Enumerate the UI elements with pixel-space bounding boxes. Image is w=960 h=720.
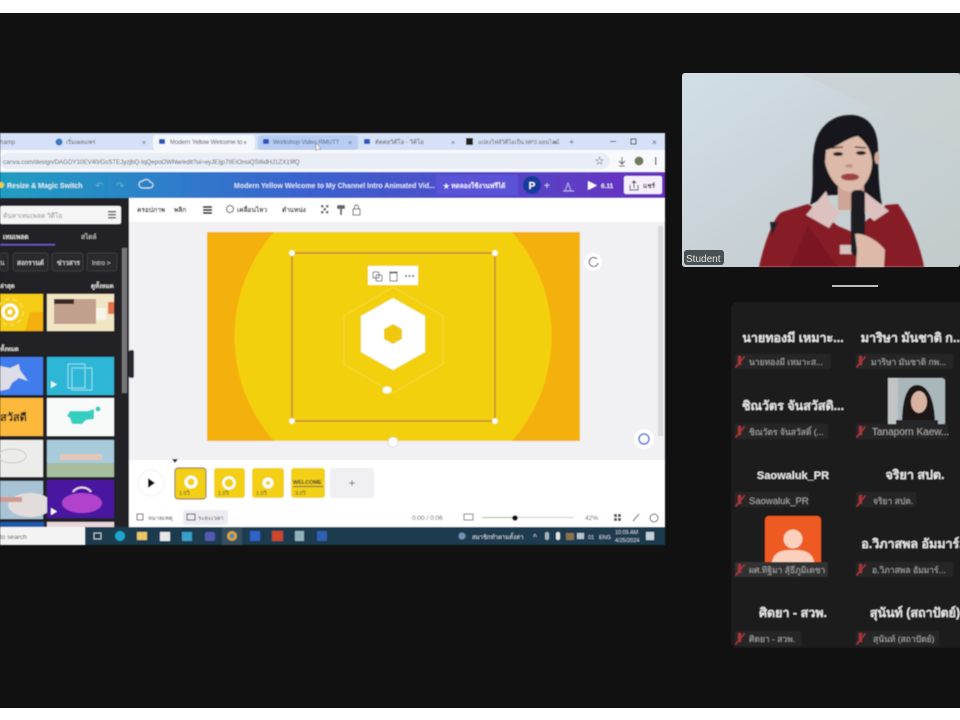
browser tab strip: ×	[243, 140, 247, 147]
browser tab strip: ×	[348, 140, 352, 147]
template thumbnails: ทั้งหมด	[0, 343, 19, 353]
mouse cursor	[316, 143, 321, 151]
name tags: อ.วิภาสพล อัมมาร์...	[872, 565, 946, 575]
canva header bar	[0, 172, 665, 198]
timeline strip: WELCOME	[293, 480, 322, 486]
canva header bar: ↶	[95, 181, 103, 192]
panel: left sidebar templates: สไตล์	[81, 232, 96, 241]
mouth	[841, 174, 859, 180]
windows taskbar: 10:05 AM	[615, 530, 639, 536]
hand	[855, 234, 885, 267]
orange avatar	[765, 516, 821, 566]
canva editor toolbar: ครอปภาพ	[137, 206, 165, 214]
name tags: Tanaporn Kaew...	[872, 427, 949, 438]
template thumbnails: สวัสดี	[0, 411, 27, 424]
panel: left sidebar templates	[0, 198, 129, 528]
panel: presenter video	[682, 73, 960, 267]
name tags: ผศ.ทิฐิมา สุ้ธีภูมิเดชา	[749, 565, 825, 576]
canva header bar: 6.11	[601, 183, 614, 190]
browser tab strip: Workshop Video RMUTT	[273, 140, 340, 146]
collar	[806, 191, 840, 228]
browser tab strip: ×	[451, 140, 455, 147]
canva header bar: P	[529, 181, 536, 192]
timeline strip: 42%	[585, 515, 598, 522]
participant names: สุนันท์ (สถาปัตย์)	[870, 605, 960, 621]
name tags: ชิณวัตร จันสวัสดิ์ (...	[749, 426, 824, 437]
windows taskbar: ^	[533, 533, 537, 542]
timeline strip: ระยะเวลา	[198, 515, 224, 522]
timeline strip: 1.0วิ	[179, 490, 190, 497]
element context menu	[368, 266, 418, 285]
participant names: อ.วิภาสพล อัมมาร์.	[861, 536, 960, 551]
participant names: จริยา สปต.	[885, 468, 945, 482]
playback time and zoom: 0:00 / 0:06	[412, 515, 443, 522]
canva header bar: ★ ทดลองใช้งานฟรีได้	[443, 181, 505, 190]
address bar: ☆	[595, 156, 604, 166]
canva editor toolbar: ตำแหน่ง	[282, 206, 306, 214]
name tags: สุนันท์ (สถาปัตย์)	[873, 634, 935, 645]
browser tab strip: ×	[553, 140, 557, 147]
canvas rotate handle	[388, 437, 398, 447]
ears	[874, 152, 880, 164]
muted mic icons	[735, 356, 866, 645]
panel: left sidebar templates: ข่าวสาร	[57, 259, 80, 267]
timeline strip: หมายเหตุ	[148, 516, 173, 522]
participant names: ชิณวัตร จันสวัสดิ...	[742, 399, 844, 413]
presenter	[759, 115, 924, 267]
canva header bar: แชร์	[643, 182, 656, 190]
windows taskbar: ENG	[599, 535, 611, 541]
panel: left sidebar templates: ล่าสุด	[0, 283, 15, 290]
address bar: canva.com/design/DAGDY10EV40/GsSTEJyzjbQ-tqQepoOWNw/edit?ui=eyJEIjp7IlEiOnsiQSI6dHJ1ZX19fQ	[3, 159, 300, 166]
bottom white strip	[0, 708, 960, 720]
rotate button	[584, 253, 602, 271]
hexagon logo	[344, 287, 443, 393]
name tags: Saowaluk_PR	[749, 496, 809, 507]
microphone	[851, 190, 865, 256]
eyes and brows	[833, 152, 843, 156]
clip 2	[214, 468, 245, 498]
canva header bar: +	[544, 181, 550, 192]
selection frame	[292, 253, 495, 421]
name tag: Student: Student	[686, 254, 721, 265]
windows taskbar	[0, 527, 665, 545]
clip 4	[291, 468, 325, 498]
canva header bar: Resize & Magic Switch	[7, 183, 82, 190]
browser tab strip: +	[569, 137, 574, 147]
top white strip	[0, 0, 960, 13]
timeline strip: 1.0วิ	[218, 490, 229, 497]
panel drag handle	[832, 285, 878, 287]
panel: left sidebar templates: ค้นหาเทมเพลต วิดีโอ	[3, 212, 62, 220]
panel: shared browser window	[0, 133, 665, 545]
sidebar collapse handle	[129, 350, 134, 378]
name tags: จริยา สปต.	[873, 496, 913, 506]
clip 1	[175, 468, 206, 499]
browser tab strip	[0, 133, 665, 150]
participant names	[742, 331, 960, 621]
play button	[138, 470, 164, 496]
add clip button	[330, 468, 374, 498]
timeline strip: +	[348, 476, 356, 490]
timeline strip: 1.0วิ	[256, 490, 267, 497]
browser tab strip: ×	[652, 138, 657, 147]
name tags: นายทองมี เหมาะส...	[749, 357, 823, 367]
timeline strip	[129, 459, 665, 527]
name tags: มาริษา มันชาติ กพ...	[871, 357, 946, 367]
neck	[838, 180, 864, 210]
browser tab strip: เริ่มเผยแพร่	[66, 138, 96, 146]
participant names: นายทองมี เหมาะ...	[742, 331, 844, 345]
participant names: Saowaluk_PR	[757, 470, 829, 482]
panel: left sidebar templates: ดูทั้งหมด	[91, 280, 114, 291]
participant names: ศิดยา - สวพ.	[759, 606, 827, 620]
canva editor toolbar: เคลื่อนไหว	[237, 204, 267, 214]
template thumbnails	[0, 294, 114, 528]
browser tab strip: ×	[142, 140, 146, 147]
Tanaporn photo	[888, 378, 945, 426]
canva header bar: ↷	[116, 181, 125, 192]
name tags	[735, 354, 953, 646]
design artboard: yellow circle on orange	[207, 232, 580, 441]
panel: participants gallery	[731, 302, 960, 648]
browser tab strip: Modern Yellow Welcome to	[170, 140, 243, 146]
panel: left sidebar templates: น	[0, 260, 5, 267]
windows taskbar: สมาชิกทำตามตั้งค่า	[472, 531, 523, 541]
face	[825, 136, 872, 192]
canva editor toolbar	[129, 198, 665, 222]
address bar	[0, 150, 665, 172]
browser tab strip: แปลงไฟล์วิดีโอเป็น MP3 ออนไลน์	[478, 138, 559, 146]
windows taskbar: 01	[588, 535, 594, 541]
timeline strip: 3.0วิ	[295, 490, 306, 497]
canva header bar: Modern Yellow Welcome to My Channel Intro Animated Vid...	[234, 183, 435, 190]
red blazer	[759, 204, 924, 267]
panel: left sidebar templates: สงกรานต์	[17, 259, 44, 267]
chair	[770, 222, 778, 236]
clip 3	[252, 468, 284, 498]
name tag: Student	[684, 250, 724, 265]
notes and duration buttons	[137, 514, 143, 520]
panel: left sidebar templates: เทมเพลต	[3, 234, 29, 241]
hair	[810, 115, 882, 205]
magic assistant button	[634, 429, 654, 449]
windows taskbar: to search	[0, 534, 27, 541]
browser tab strip: hamp	[0, 140, 16, 146]
panel: left sidebar templates: Intro >	[92, 260, 111, 267]
canva editor toolbar: พลิก	[174, 206, 186, 214]
windows taskbar: 4/25/2024	[615, 538, 639, 544]
browser tab strip: ตัดต่อวิดีโอ - วิดีโอ	[375, 138, 424, 146]
name tags: ศิดยา - สวพ.	[749, 634, 795, 644]
canvas workspace background	[129, 222, 665, 460]
